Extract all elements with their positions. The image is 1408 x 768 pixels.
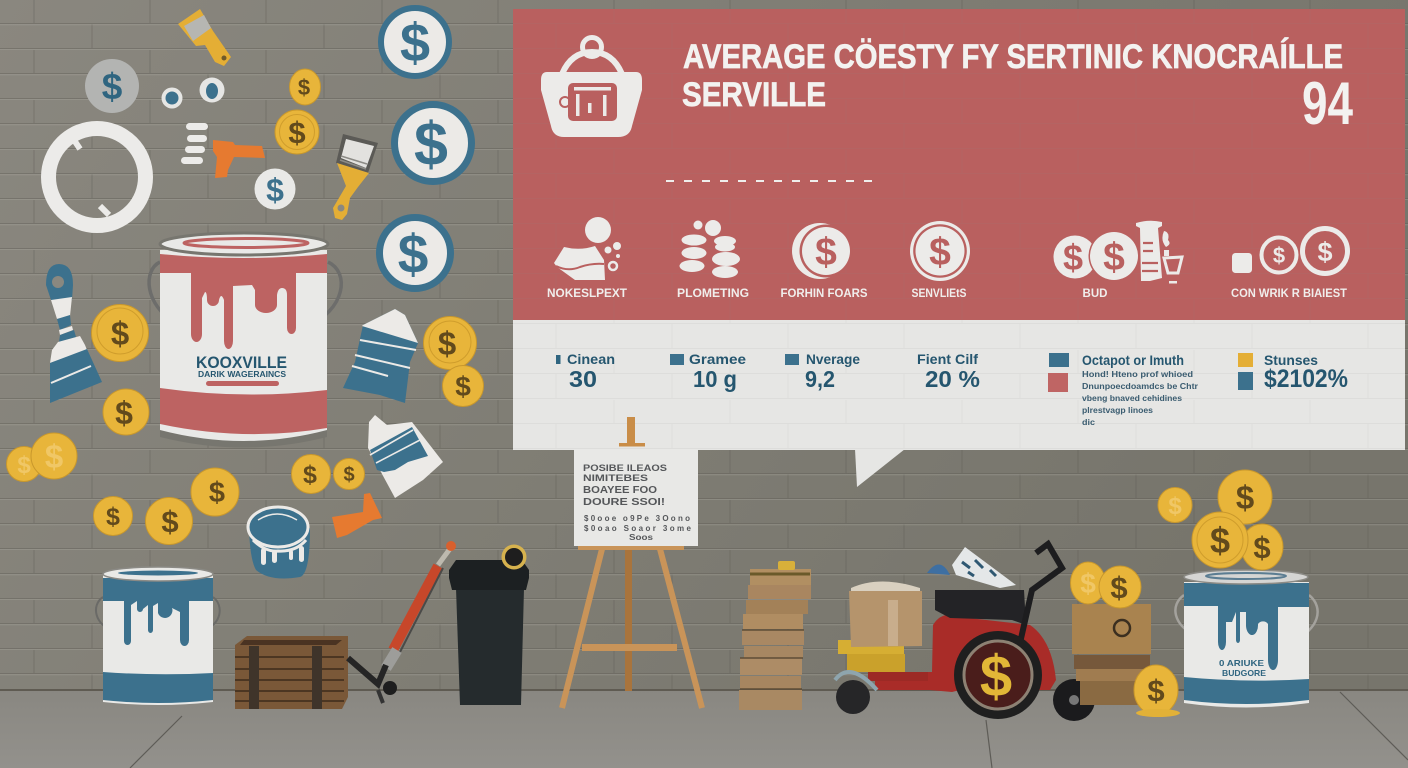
stat: Nverage 9,2: Nverage [806,351,860,367]
icon: small white coin left [162,88,182,108]
panel: red header band [513,9,1405,320]
icon: coin lower left [94,496,132,536]
icon: yellow coin top: $ [298,75,310,100]
icon: pale coin top right: $ [1168,493,1182,520]
icon: wooden easel [562,417,702,708]
panel: painting costs [513,9,1405,487]
panel: white stats band [513,320,1405,450]
icon: yellow box [838,640,905,672]
icon: dollar coin with crescent: $ [815,231,837,274]
icon: coin top right large [1218,470,1272,524]
icon: blue dollar coin middle: $ [414,110,448,178]
icon: yellow coin second: $ [288,115,306,150]
icon: coin behind right [1241,524,1283,570]
icon: yellow coin top [290,69,320,105]
icon: wooden crate [235,636,348,709]
stat: Nverage 9,2 [785,351,860,392]
legend: Octapot or Imuth: Octapot or Imuth [1082,352,1184,368]
sidewalk [0,689,1408,768]
label: second service: PLOMETING [677,288,749,300]
icon: blue dollar coin bottom: $ [398,223,428,285]
icon: pale coin large: $ [45,438,63,475]
label: first service: NOKESLPEXT [547,288,627,300]
icon: square and two coin rings: $ [1273,243,1285,268]
icon: orange paint tool [213,140,265,178]
icon: red long-handled tool [348,541,456,703]
icon: yellow coin center small: $ [343,464,355,486]
stat: Cinean 30: 30 [569,366,597,392]
icon: yellow coin center: $ [303,461,317,489]
icon: coin pile front: $ [1210,520,1230,561]
legend body text: vbeng bnaved cehidines [1082,393,1182,403]
stat: Stunses $2102%: Stunses [1264,352,1318,368]
icon: yellow coin right lower: $ [455,371,471,402]
icon: paint bowl [248,507,310,578]
icon: coin on box pale: $ [1080,568,1096,599]
notice board on easel: NIMITEBES [583,473,648,483]
stat: Cinean 30: Cinean [567,351,615,367]
icon: blue dollar coin bottom [380,218,450,288]
label: sixth service: CON WRIK R BIAIEST [1231,288,1347,300]
can label: 0 ARIUKE [1219,658,1264,668]
title [682,38,1343,114]
icon: coin left two: $ [115,395,133,431]
dashed divider [666,180,875,182]
stat: Cinean 30 [556,351,615,392]
icon: dollar coin with crescent [792,223,852,279]
small front wheel [1053,679,1095,721]
can label: KOOXVILLE: KOOXVILLE [196,353,287,372]
icon: large white ring [48,128,146,226]
icon: yellow coin center [292,454,330,494]
icon: square and two coin rings [1232,228,1348,274]
icon: ringed dollar coin: $ [929,231,951,274]
icon: coin left one: $ [111,315,129,352]
label: fifth service: BUD [1082,288,1108,300]
icon: pale coin small: $ [17,452,31,479]
legend body text: Dnunpoecdoamdcs be Chtr [1082,381,1199,391]
icon: coins with bottle and cup: $ [1063,237,1083,278]
small rear wheel [835,672,877,714]
icon: blue brush head [343,309,418,403]
icon: grey dollar coin [85,59,139,113]
stat: Stunses $2102% [1238,352,1348,393]
stat: Fient Cilf 20 %: Fient Cilf [917,351,978,367]
legend body text: dic [1082,417,1095,427]
notice board on easel: $0oao Soaor 3ome [584,524,692,533]
title: SERVILLE [682,76,826,114]
icon: coin on box [1099,566,1141,608]
sticker on bin [502,544,526,570]
icon: yellow brush top [178,9,231,66]
icon: coins with bottle and cup: $ [1103,236,1125,279]
icon: white coin with dollar: $ [266,172,284,208]
legend body text: plrestvagp linoes [1082,405,1153,415]
icon: coin left one [92,304,148,362]
stat: Gramee 10 g: Gramee [689,351,746,367]
legend: Octapot or Imuth [1048,352,1199,427]
notice board on easel: $0ooe o9Pe 3Oono [584,514,690,523]
icon: coin lower left: $ [106,503,120,531]
notice board on easel: BOAYEE FOO [583,484,657,496]
icon: yellow coin second [275,110,319,154]
stat: Fient Cilf 20 % [917,351,980,392]
icon: blue dollar coin middle [394,104,472,182]
icon: coin on box pale [1070,562,1106,604]
icon: yellow brush right [333,134,378,220]
icon: large red paint can [149,233,341,448]
stat: Fient Cilf 20 %: 20 % [925,366,980,392]
icon: yellow coin right lower [442,366,484,406]
icon: pale coin small [6,446,42,482]
icon: cardboard box with paper [849,582,922,647]
icon: blue dollar coin top [381,8,449,76]
icon: ringed dollar coin [910,221,970,281]
icon: paint stack and bubbles [554,217,621,280]
icon: coin lower third [191,468,239,516]
stat: Nverage 9,2: 9,2 [805,366,835,392]
icon: grey dollar coin: $ [102,66,123,107]
icon: blue paint can left [96,567,220,705]
icon: white brush head [368,415,443,498]
icon: coins with bottle and cup [1054,221,1182,284]
icon: stacked cardboard flats [739,561,811,710]
icon: coin left two [103,389,149,435]
icon: coin on box: $ [1110,570,1128,605]
label: third service: FORHIN FOARS [780,288,868,300]
year number: 94 [1302,70,1353,137]
speech bubble tail [855,449,905,487]
icon: coin lower second: $ [161,504,179,539]
icon: white dashes [181,123,208,164]
icon: yellow coin right upper: $ [438,325,456,362]
icon: pale coin top right [1158,488,1192,522]
icon: yellow coin center small [334,458,364,490]
icon: yellow coin right upper [424,316,476,370]
icon: white coin with dollar [254,168,296,210]
icon: square and two coin rings: $ [1317,237,1333,267]
icon: small white coin right [200,78,224,102]
icon: coin on ground [1134,665,1180,717]
stat: Gramee 10 g: 10 g [693,366,737,392]
stat: Gramee 10 g [670,351,746,392]
notice board on easel: DOURE SSOI! [583,496,665,508]
icon: blue dollar coin top: $ [400,13,430,73]
icon: blue paint can right: BUDGORE [1222,668,1266,678]
icon: right cardboard boxes [1072,604,1151,705]
notice board on easel: POSIBE ILEAOS [583,463,667,473]
notice board on easel [574,449,698,546]
icon: blue paint can right [1175,570,1318,708]
icon: red wheeled cart [835,544,1095,721]
big wheel with dollar sign [954,631,1042,719]
stat: Stunses $2102%: $2102% [1264,365,1348,393]
icon: orange scraper [332,493,382,538]
icon: coin on ground: $ [1147,673,1165,708]
icon: coin top right large: $ [1236,479,1254,516]
icon: black trash bin [449,544,529,705]
label: fourth service: SENVLIEtS [912,288,967,300]
notice board on easel: Soos [629,533,654,542]
icon: coin lower third: $ [209,477,225,509]
icon: pale coin large [31,433,77,479]
icon: blue striped brush [46,264,102,403]
legend body text: Hond! Hteno prof whioed [1082,369,1193,379]
can sublabel: DARIK WAGERAINCS [198,370,287,379]
icon: coin lower second [146,498,192,544]
legend body text [1082,369,1199,427]
icon: coin pile front [1192,512,1248,568]
icon: coin behind right: $ [1253,530,1271,565]
icon: paint pot [541,38,642,137]
icon: stacked discs [680,220,740,278]
big wheel with dollar sign: $ [980,644,1012,709]
